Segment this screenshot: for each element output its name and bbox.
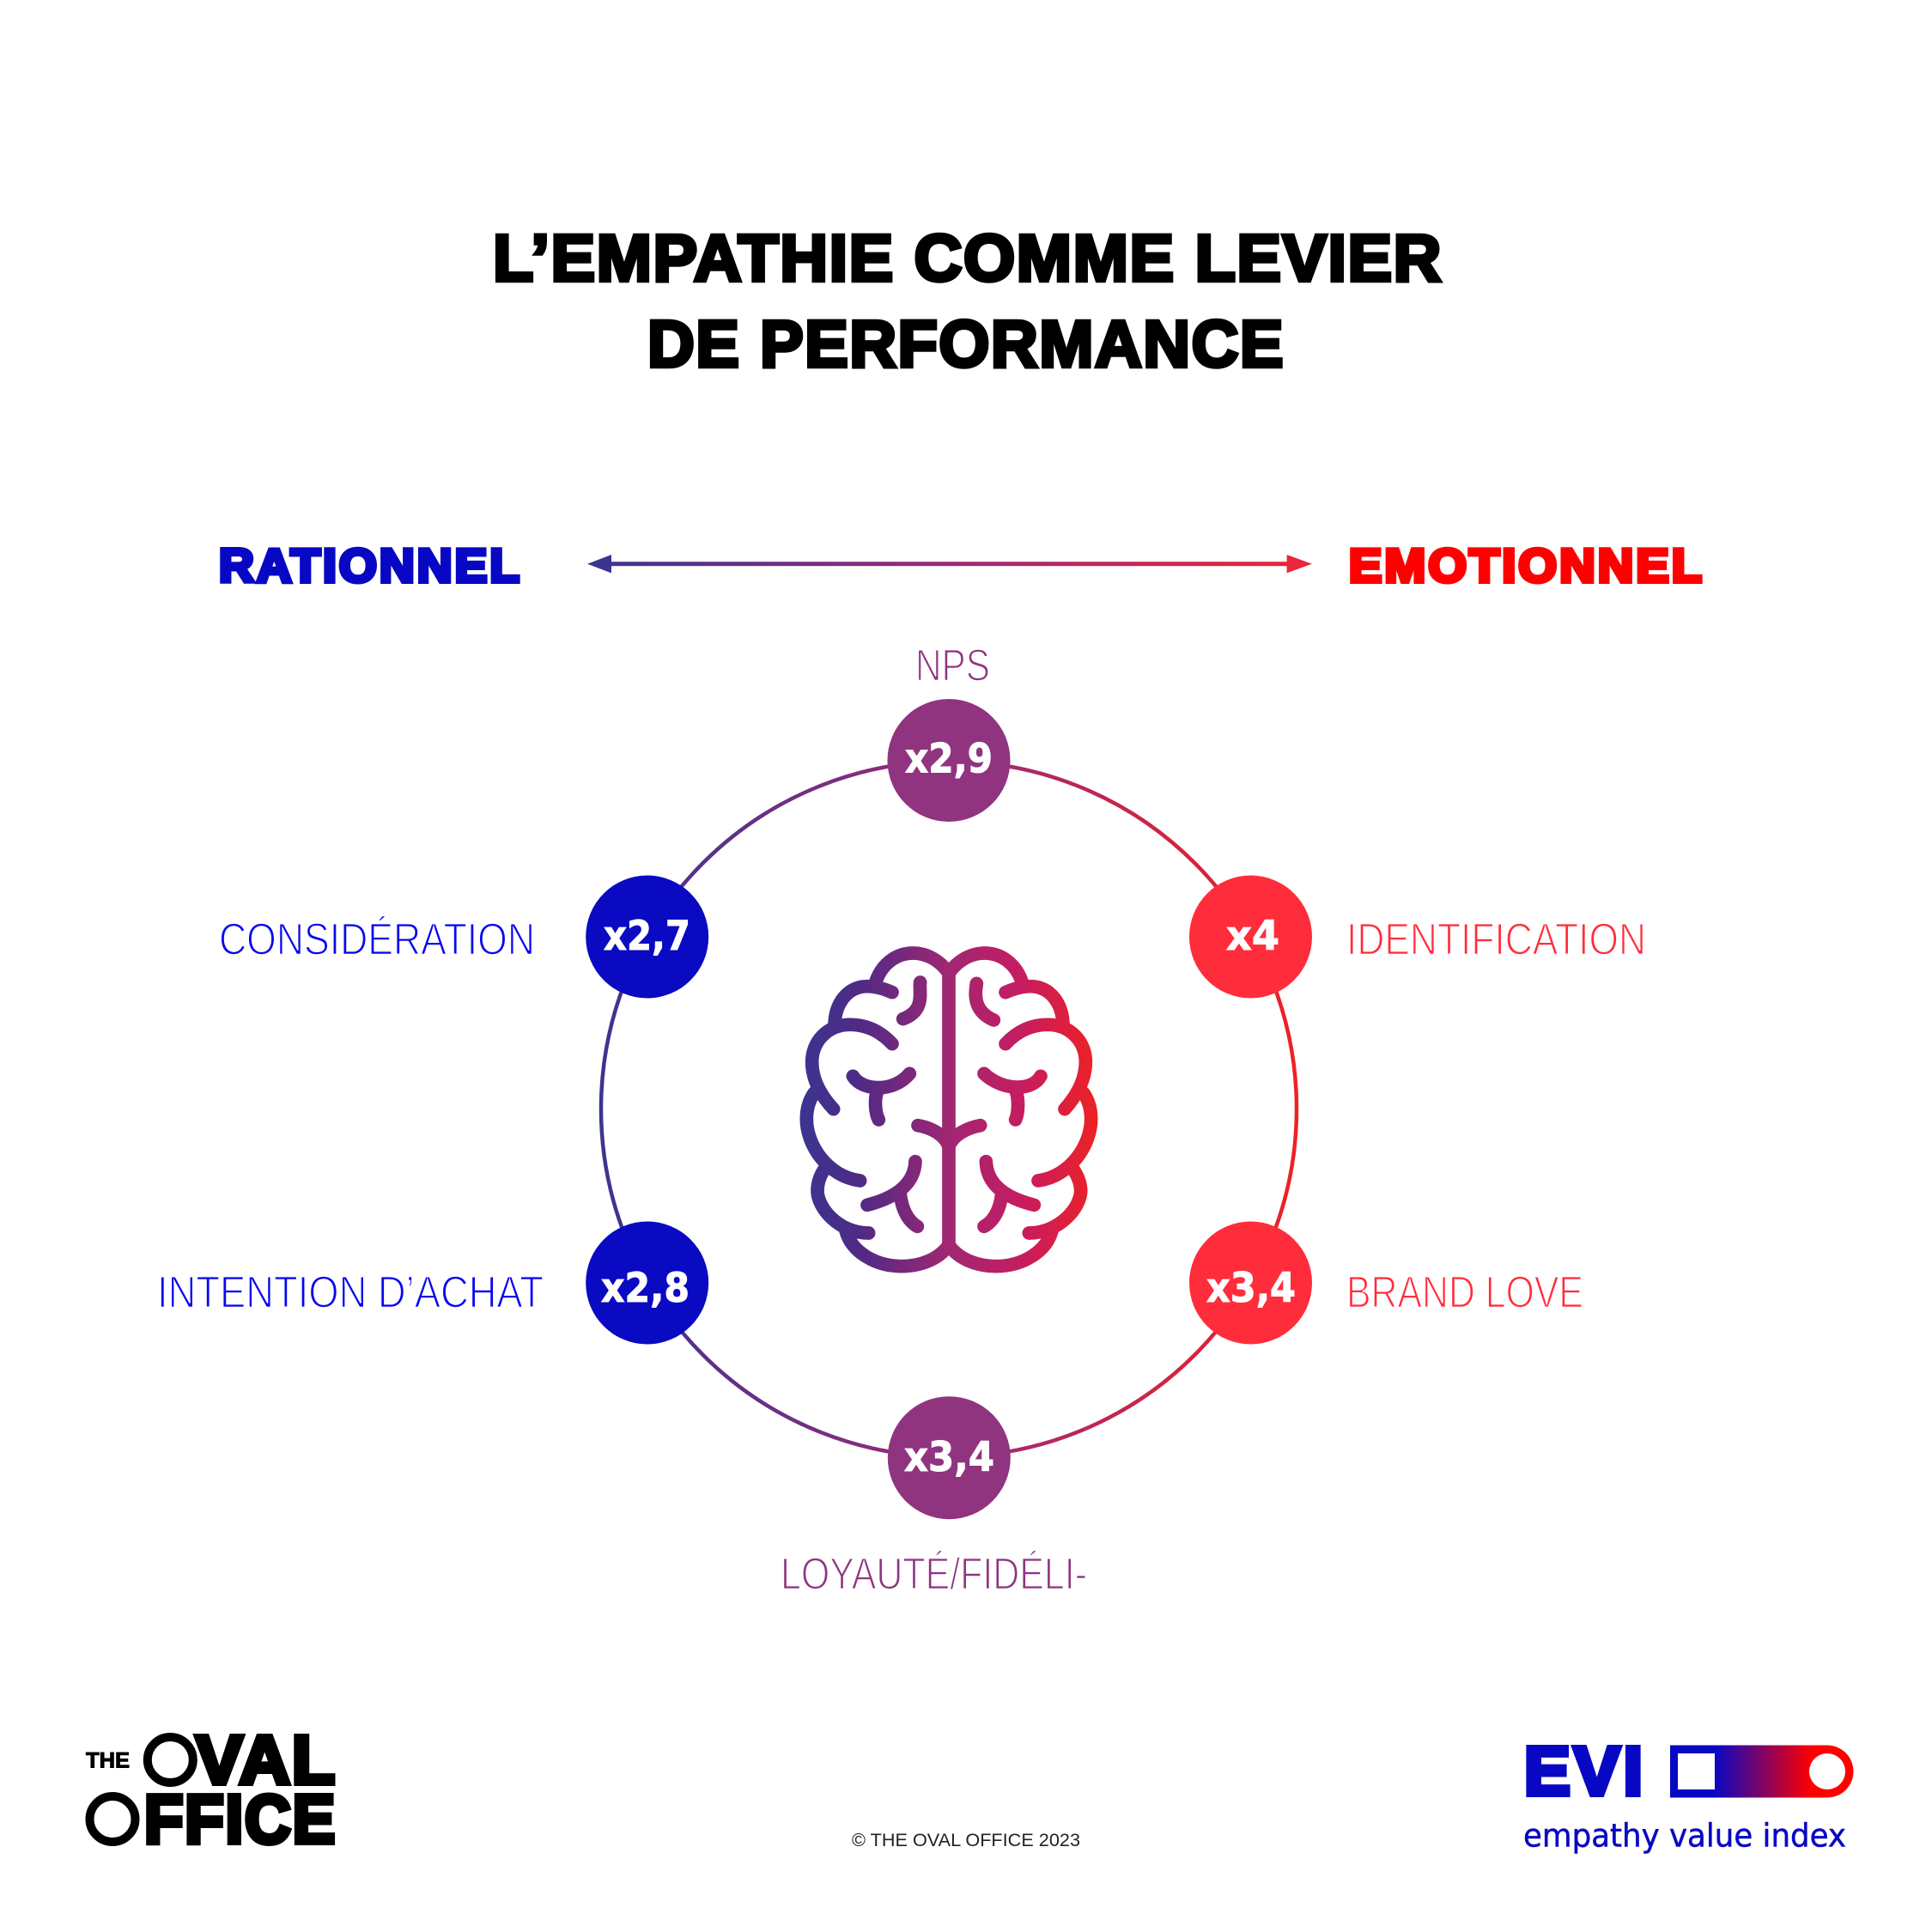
- label: loyauté: LOYAUTÉ/FIDÉLI-: [781, 1549, 1087, 1599]
- arrow: rational to emotional scale: [587, 555, 1312, 573]
- logo: EVI empathy value index: empathy value index: [1523, 1817, 1846, 1855]
- node: loyauté: x3,4: [904, 1434, 994, 1481]
- node: NPS: x2,9: [905, 735, 993, 783]
- node: NPS: [888, 699, 1010, 822]
- node: identification: x4: [1226, 913, 1279, 960]
- node: loyauté: [888, 1396, 1011, 1519]
- logo: EVI empathy value index: EVI: [1524, 1733, 1646, 1809]
- node: identification: [1189, 876, 1312, 998]
- label: intention d'achat: INTENTION D’ACHAT: [157, 1267, 544, 1317]
- node: intention d'achat: [586, 1221, 708, 1345]
- node: considération: x2,7: [604, 913, 690, 960]
- heading: rationnel: RATIONNEL: [219, 539, 522, 592]
- title: [493, 222, 1443, 381]
- node: brand love: x3,4: [1206, 1265, 1296, 1312]
- copyright: © THE OVAL OFFICE 2023: [852, 1831, 1080, 1850]
- label: NPS: NPS: [915, 641, 990, 690]
- node: brand love: [1189, 1221, 1312, 1345]
- logo: the oval office: [86, 1722, 337, 1857]
- logo: the oval office: VAL: [196, 1722, 337, 1798]
- label: brand love: BRAND LOVE: [1346, 1267, 1583, 1317]
- title: DE PERFORMANCE: [647, 307, 1285, 381]
- label: considération: CONSIDÉRATION: [219, 915, 535, 965]
- logo: the oval office: FFICE: [144, 1781, 337, 1857]
- icon: brain: [806, 953, 1091, 1267]
- logo: EVI empathy value index: [1523, 1733, 1853, 1855]
- label: identification: IDENTIFICATION: [1346, 915, 1646, 965]
- node: considération: [586, 876, 708, 998]
- title: L’EMPATHIE COMME LEVIER: [493, 222, 1443, 295]
- heading: emotionnel: EMOTIONNEL: [1349, 539, 1704, 592]
- logo: the oval office: THE: [86, 1748, 130, 1772]
- ring connecting the indicators: [601, 761, 1297, 1456]
- node: intention d'achat: x2,8: [601, 1265, 690, 1312]
